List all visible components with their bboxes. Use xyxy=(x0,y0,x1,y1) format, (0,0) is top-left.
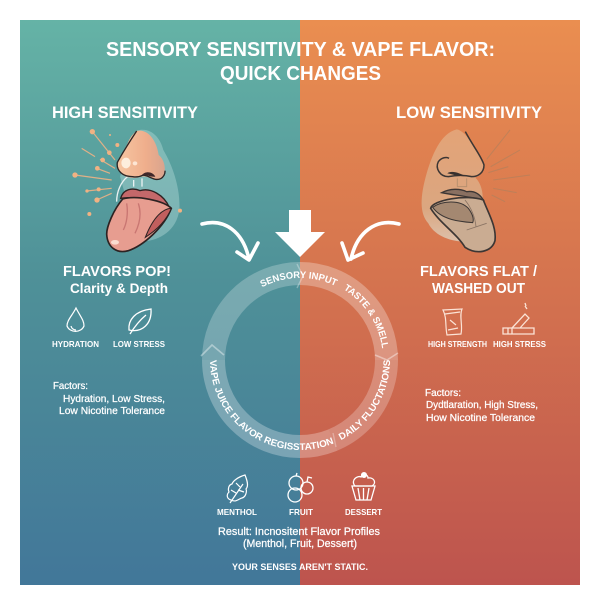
panel: high sensitivity background xyxy=(20,20,300,585)
text: closing line: YOUR SENSES AREN'T STATIC. xyxy=(232,562,368,572)
text: flavors flat: FLAVORS FLAT / xyxy=(420,263,538,280)
label: hydration: HYDRATION xyxy=(52,339,99,349)
arrow: central down xyxy=(275,210,325,257)
text: result: (Menthol, Fruit, Dessert) xyxy=(243,538,357,550)
text: factors right: How Nicotine Tolerance xyxy=(426,413,535,424)
icon: vivid nose and tongue xyxy=(72,129,182,252)
text: result: Result: Incnositent Flavor Profiles xyxy=(218,526,380,538)
text: flavors flat xyxy=(420,263,538,297)
text: factors right xyxy=(425,388,538,424)
ring label: daily fluctuations: DAILY FLUCTATIONS xyxy=(338,360,390,440)
heading: high sensitivity: HIGH SENSITIVITY xyxy=(52,103,199,122)
text: factors left: Hydration, Low Stress, xyxy=(63,394,165,405)
icon: dessert cupcake xyxy=(352,473,375,500)
chart: circular cycle ring xyxy=(200,262,398,458)
text: factors right: Factors: xyxy=(425,388,461,399)
text: factors left: Low Nicotine Tolerance xyxy=(59,406,165,417)
icon: leaf xyxy=(129,309,151,334)
text: factors left xyxy=(53,381,165,417)
icon: menthol leaf xyxy=(227,475,248,503)
icon: crumpled cup xyxy=(443,309,462,335)
label: high strength: HIGH STRENGTH xyxy=(428,339,487,349)
icon: water drop xyxy=(67,308,84,331)
ring label: vape juice flavor registration: VAPE JUICE FLAVOR REGISSTATION xyxy=(210,360,334,450)
text: factors left: Factors: xyxy=(53,381,88,392)
label: high stress: HIGH STRESS xyxy=(493,339,546,349)
title: SENSORY SENSITIVITY & VAPE FLAVOR: xyxy=(106,39,495,61)
panel: low sensitivity background xyxy=(300,20,580,585)
text: result xyxy=(218,526,380,550)
title xyxy=(106,39,495,85)
arrow: left curved xyxy=(202,223,258,260)
text: factors right: Dydtlaration, High Stress, xyxy=(426,400,538,411)
icon: dull nose and tongue xyxy=(422,129,530,252)
text: flavors flat: WASHED OUT xyxy=(432,280,525,297)
ring label: sensory input: SENSORY INPUT xyxy=(260,271,338,286)
arrow: right curved xyxy=(342,223,399,260)
label: fruit: FRUIT xyxy=(289,507,314,517)
heading: low sensitivity: LOW SENSITIVITY xyxy=(396,103,543,122)
label: dessert: DESSERT xyxy=(345,507,383,517)
text: flavors pop xyxy=(63,263,171,296)
title: QUICK CHANGES xyxy=(220,63,381,85)
icon: cigarette xyxy=(503,303,534,334)
label: menthol: MENTHOL xyxy=(217,507,257,517)
label: low stress: LOW STRESS xyxy=(113,339,165,349)
text: flavors pop: FLAVORS POP! xyxy=(63,263,171,280)
icon: fruit berries xyxy=(288,473,313,502)
text: flavors pop: Clarity & Depth xyxy=(70,280,168,296)
ring label: taste and smell: TASTE & SMELL xyxy=(345,284,388,348)
